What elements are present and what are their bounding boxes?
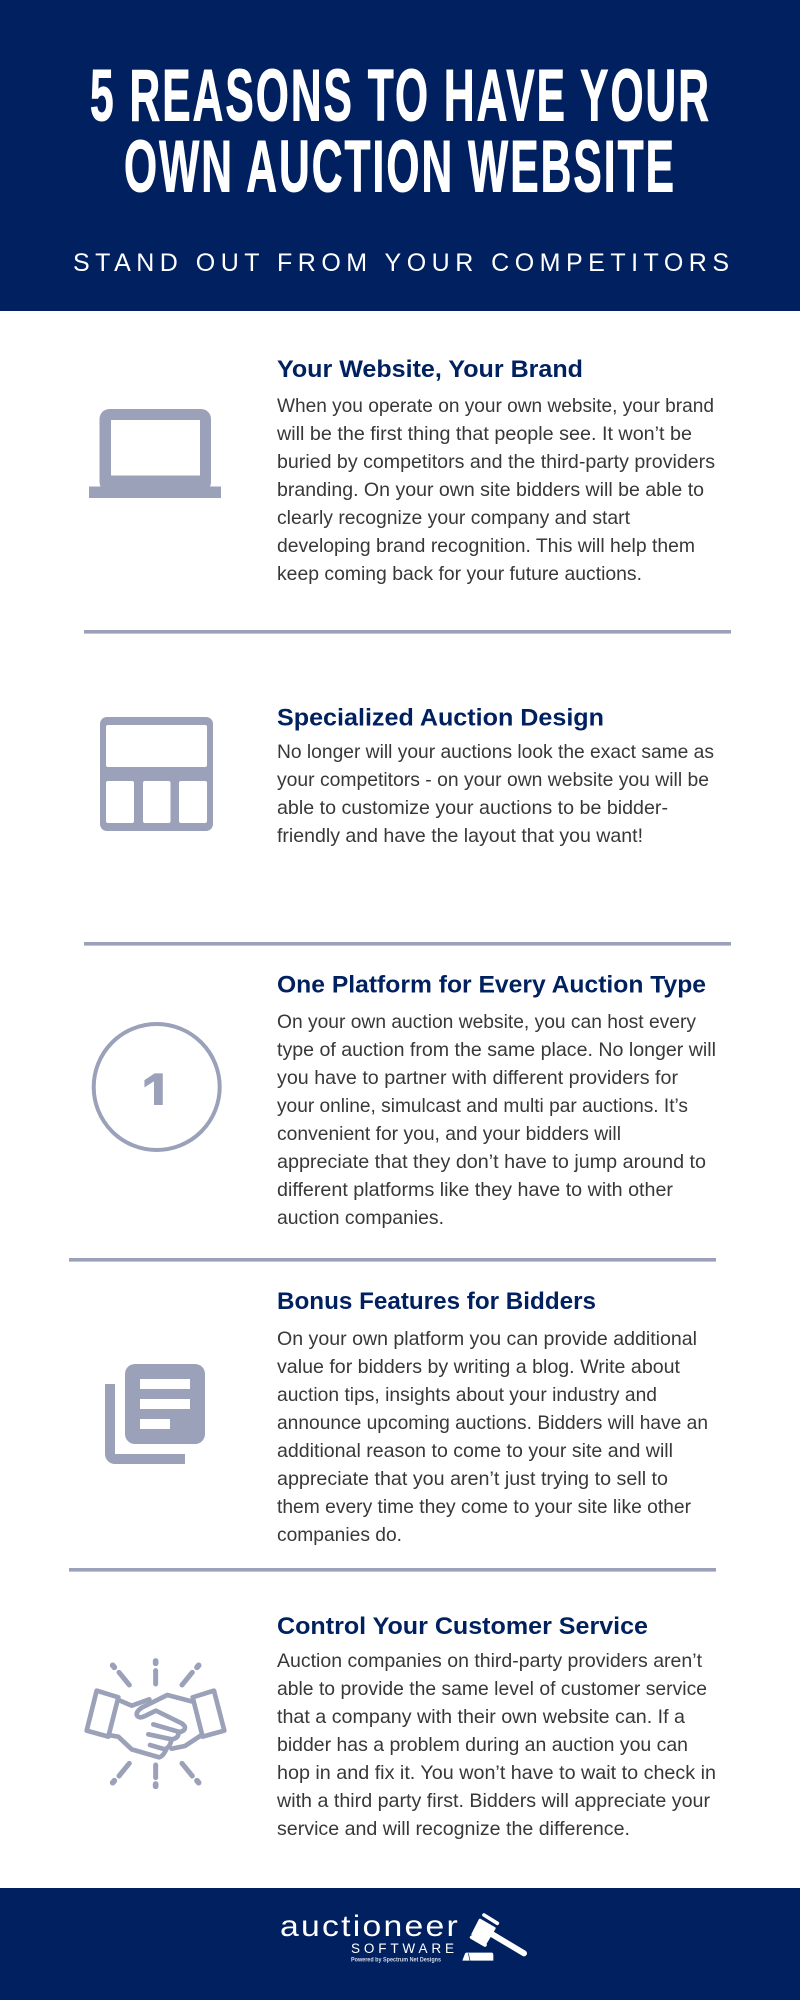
icon: gavel bbox=[462, 1915, 524, 1961]
body text: buried by competitors and the third-party providers bbox=[277, 451, 715, 473]
panel: bonus features for bidders bbox=[105, 1288, 708, 1546]
body text: developing brand recognition. This will help them bbox=[277, 535, 695, 557]
body text: value for bidders by writing a blog. Write about bbox=[277, 1356, 681, 1378]
body text: appreciate that you aren’t just trying to sell to bbox=[277, 1468, 668, 1490]
title bbox=[90, 56, 711, 208]
logo wordmark: SOFTWARE bbox=[351, 1941, 454, 1956]
body text: will be the first thing that people see. It won’t be bbox=[276, 423, 692, 445]
heading: Bonus Features for Bidders bbox=[277, 1288, 596, 1315]
body text bbox=[277, 741, 714, 847]
body text: additional reason to come to your site and will bbox=[277, 1440, 673, 1462]
heading: Your Website, Your Brand bbox=[277, 356, 583, 383]
subtitle: STAND OUT FROM YOUR COMPETITORS bbox=[73, 249, 729, 277]
body text bbox=[276, 1650, 716, 1840]
body text: service and will recognize the difference. bbox=[277, 1818, 630, 1840]
body text: On your own platform you can provide additional bbox=[277, 1328, 697, 1350]
heading: One Platform for Every Auction Type bbox=[277, 972, 706, 998]
icon: numbered circle: 1 bbox=[141, 1062, 173, 1127]
body text: that a company with their own website can. If a bbox=[277, 1706, 685, 1728]
body text: On your own auction website, you can host every bbox=[277, 1011, 696, 1033]
heading: Control Your Customer Service bbox=[277, 1613, 648, 1640]
body text: them every time they come to your site like other bbox=[277, 1496, 691, 1518]
body text: When you operate on your own website, your brand bbox=[277, 395, 714, 417]
icon: numbered circle bbox=[94, 1024, 220, 1150]
logo wordmark bbox=[280, 1910, 460, 1964]
body text: branding. On your own site bidders will be able to bbox=[277, 479, 704, 501]
icon: laptop bbox=[89, 409, 221, 498]
panel: your website, your brand bbox=[89, 356, 715, 585]
logo wordmark: auctioneer bbox=[280, 1910, 460, 1943]
icon: handshake bbox=[87, 1661, 224, 1786]
body text: auction companies. bbox=[277, 1207, 444, 1229]
body text: your competitors - on your own website you will be bbox=[277, 769, 709, 791]
body text: type of auction from the same place. No longer will bbox=[277, 1039, 716, 1061]
body text: your online, simulcast and multi par auctions. It’s bbox=[277, 1095, 688, 1117]
body text bbox=[277, 1328, 708, 1546]
body text: you have to partner with different providers for bbox=[277, 1067, 679, 1089]
body text: bidder has a problem during an auction you can bbox=[277, 1734, 688, 1756]
heading: Specialized Auction Design bbox=[277, 704, 604, 732]
body text: able to provide the same level of customer service bbox=[277, 1678, 707, 1700]
header banner bbox=[0, 0, 800, 311]
body text bbox=[276, 395, 715, 585]
body text: companies do. bbox=[277, 1524, 402, 1546]
panel: specialized auction design bbox=[100, 704, 714, 847]
icon: news pages bbox=[105, 1364, 205, 1464]
body text: auction tips, insights about your industry and bbox=[277, 1384, 657, 1406]
body text: hop in and fix it. You won’t have to wait to check in bbox=[277, 1762, 716, 1784]
body text: friendly and have the layout that you want! bbox=[277, 825, 643, 847]
body text: announce upcoming auctions. Bidders will have an bbox=[277, 1412, 708, 1434]
logo wordmark: Powered by Spectrum Net Designs bbox=[351, 1956, 441, 1964]
body text: appreciate that they don’t have to jump around to bbox=[277, 1151, 706, 1173]
body text: different platforms like they have to with other bbox=[277, 1179, 674, 1201]
icon: layout grid bbox=[100, 717, 213, 831]
body text: able to customize your auctions to be bidder- bbox=[277, 797, 668, 819]
body text bbox=[277, 1011, 716, 1229]
body text: with a third party first. Bidders will appreciate your bbox=[276, 1790, 711, 1812]
panel: control your customer service bbox=[87, 1613, 716, 1840]
body text: keep coming back for your future auctions. bbox=[277, 563, 642, 585]
panel: one platform for every auction type bbox=[94, 972, 716, 1229]
body text: convenient for you, and your bidders will bbox=[277, 1123, 621, 1145]
footer banner bbox=[0, 1888, 800, 2000]
body text: No longer will your auctions look the exact same as bbox=[277, 741, 714, 763]
body text: clearly recognize your company and start bbox=[277, 507, 631, 529]
body text: Auction companies on third-party providers aren’t bbox=[277, 1650, 703, 1672]
